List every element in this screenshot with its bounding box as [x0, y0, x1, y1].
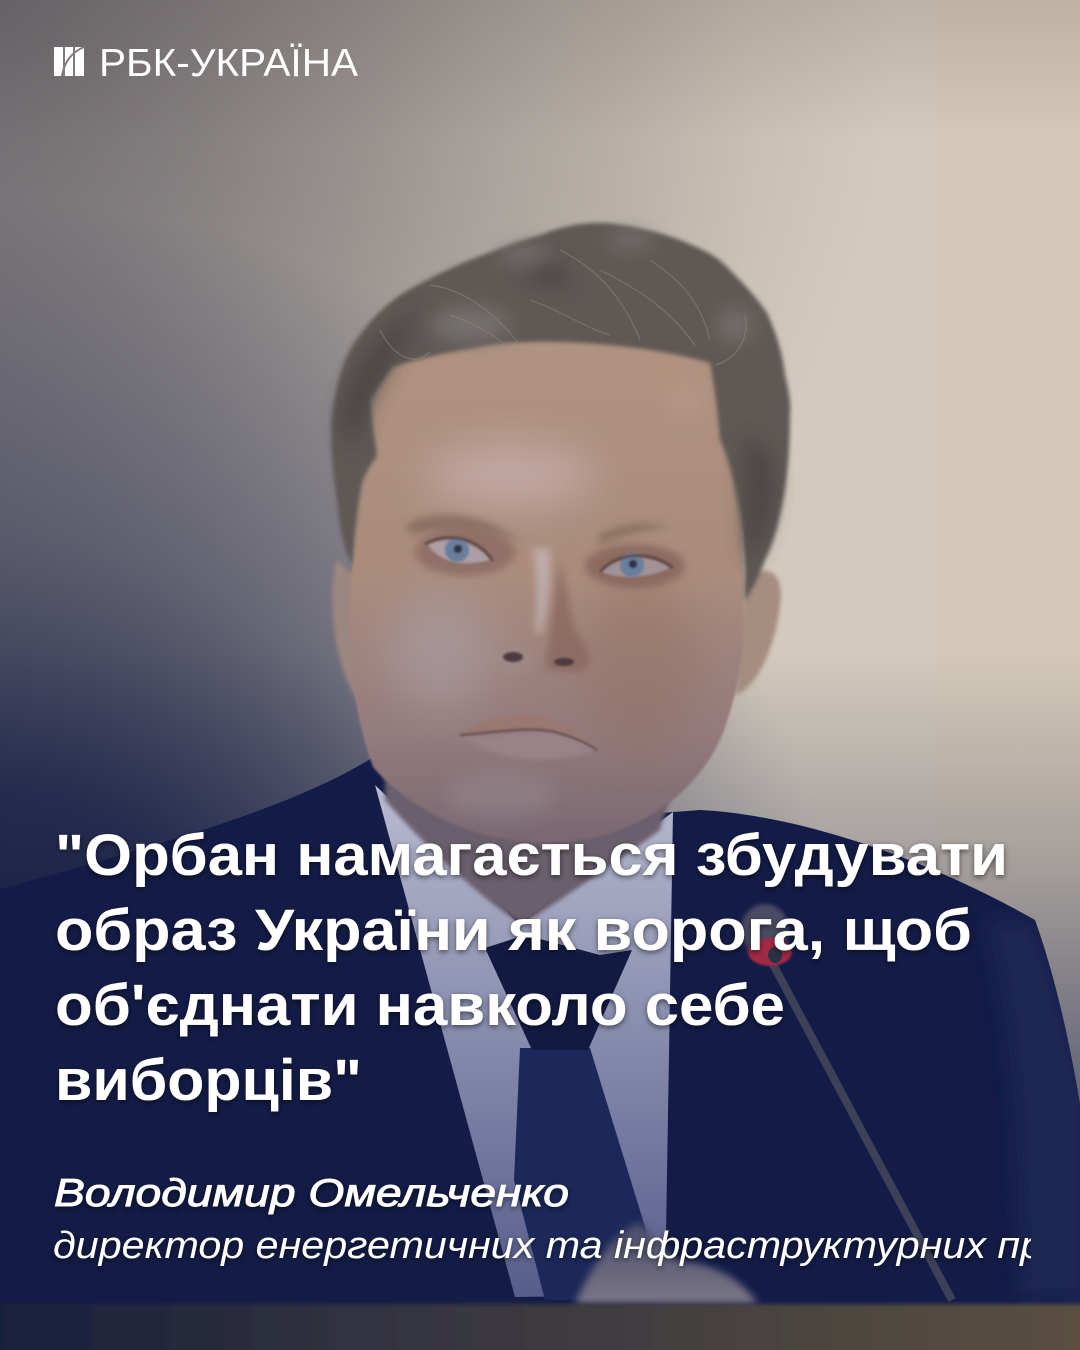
left ear: [332, 560, 372, 705]
right eye socket: [585, 544, 685, 588]
hand: [575, 1222, 758, 1304]
hair: [331, 223, 790, 602]
quote headline: об'єднати навколо себе: [55, 973, 785, 1038]
speaker name: Володимир Омельченко: [54, 1172, 569, 1215]
left eye socket: [415, 528, 515, 576]
desk: [0, 1304, 1080, 1350]
quote headline: виборців": [55, 1048, 362, 1113]
nose: [495, 548, 589, 674]
mouth: [460, 714, 597, 759]
microphone: [741, 904, 952, 1300]
left eye: [425, 537, 493, 563]
hair strands: [380, 250, 746, 365]
right ear: [735, 571, 781, 695]
tie: [485, 935, 646, 1300]
quote headline: "Орбан намагається збудувати: [55, 823, 1008, 888]
hair grey highlights: [430, 231, 753, 343]
hair dark patches: [340, 261, 774, 560]
chin highlight: [445, 773, 555, 817]
right eye: [600, 553, 673, 577]
logo icon: [54, 47, 84, 76]
speaker role: директор енергетичних та інфраструктурних пр: [53, 1225, 1043, 1267]
quote headline: образ України як ворога, щоб: [55, 898, 972, 963]
temple highlight: [667, 384, 703, 416]
logo wordmark: РБК-УКРАЇНА: [99, 42, 358, 85]
face: [350, 319, 745, 843]
right sleeve shading: [994, 920, 1080, 1296]
left eyebrow: [405, 514, 520, 540]
suit jacket: [0, 758, 1080, 1310]
neck: [385, 770, 672, 925]
right eyebrow: [598, 523, 668, 545]
logo: [54, 42, 358, 85]
left cheek highlight: [385, 590, 495, 710]
forehead highlight: [425, 445, 595, 505]
shirt: [375, 785, 673, 1297]
right face shade: [580, 580, 700, 760]
quote headline: [55, 823, 1008, 1113]
